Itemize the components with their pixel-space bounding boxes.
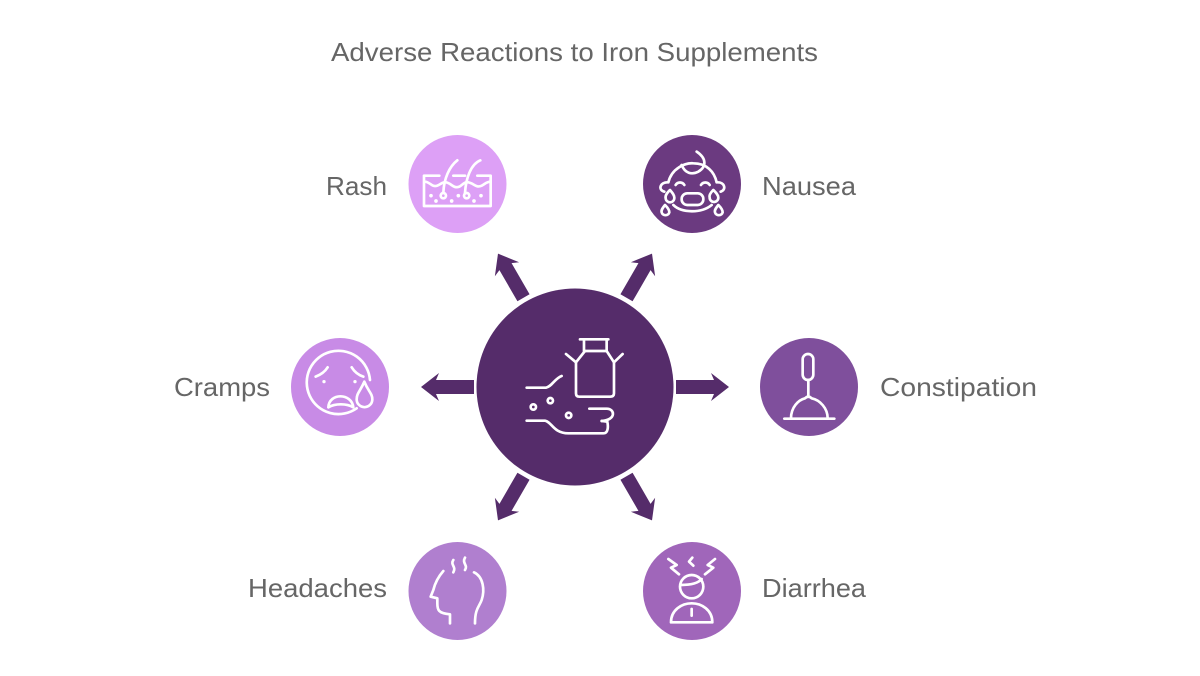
arrow: to cramps — [421, 373, 474, 401]
headaches circle — [408, 542, 506, 640]
icon: stressed person — [668, 558, 715, 622]
panel: headaches — [248, 542, 506, 640]
nausea circle — [643, 135, 741, 233]
panel: center hub — [476, 288, 674, 486]
arrow: to headaches — [486, 469, 536, 527]
panel: rash — [326, 135, 506, 233]
icon: head with steam — [431, 558, 483, 623]
label: diarrhea: Diarrhea — [762, 573, 867, 603]
label: headaches: Headaches — [248, 573, 387, 603]
icon: sad face with drop — [307, 351, 372, 414]
arrows — [421, 247, 729, 527]
icon: crying face — [660, 152, 724, 215]
label: nausea: Nausea — [762, 171, 857, 201]
panel: cramps — [174, 338, 389, 436]
arrow: to nausea — [614, 247, 664, 305]
diarrhea circle — [643, 542, 741, 640]
cramps circle — [291, 338, 389, 436]
icon: plunger — [784, 354, 834, 419]
arrow: to constipation — [676, 373, 729, 401]
arrow: to diarrhea — [614, 469, 664, 527]
title: Adverse Reactions to Iron Supplements — [331, 37, 818, 67]
label: rash: Rash — [326, 171, 387, 201]
label: constipation: Constipation — [880, 372, 1037, 402]
panel: diarrhea — [643, 542, 867, 640]
panel: constipation — [760, 338, 1037, 436]
constipation circle — [760, 338, 858, 436]
rash circle — [408, 135, 506, 233]
arrow: to rash — [486, 247, 536, 305]
hub circle — [476, 288, 674, 486]
icon: skin section — [424, 160, 491, 206]
panel: nausea — [643, 135, 857, 233]
icon: bottle and hand — [527, 339, 623, 433]
label: cramps: Cramps — [174, 372, 270, 402]
